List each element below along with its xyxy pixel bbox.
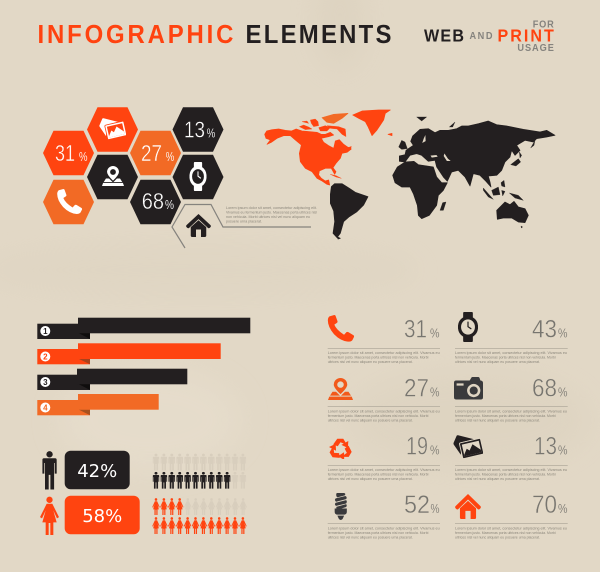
stat: photo cards 13%: % bbox=[558, 443, 568, 458]
callout text: Lorem ipsum dolor sit amet, consectetur adipiscing elit. bbox=[226, 205, 317, 210]
title: ELEMENTS bbox=[246, 20, 392, 49]
hexagon cluster bbox=[43, 107, 317, 248]
hexagon: 13% bbox=[172, 107, 224, 152]
bar 2: 2 bbox=[43, 352, 48, 362]
hexagon: phone bbox=[43, 180, 94, 224]
ranked ribbon bars bbox=[37, 318, 250, 415]
stat: recycle 19%: 19 bbox=[406, 433, 428, 461]
stat: bulb 52%: ultrices nisl vel nunc aliquam eu posuere urna placerat. bbox=[328, 536, 413, 540]
stat: pin 27%: 27 bbox=[404, 375, 429, 403]
stat: recycle 19%: % bbox=[430, 443, 440, 458]
stat: camera 68%: 68 bbox=[532, 375, 557, 403]
stat: phone 31% bbox=[328, 315, 440, 364]
stat: watch 43% bbox=[455, 312, 568, 364]
subtitle: web and print usage: WEB bbox=[424, 26, 464, 46]
stat: recycle 19%: fermentum justo. Maecenas porta ultrices nisl non vehicula. Morbi bbox=[328, 473, 429, 477]
hexagon: photo cards bbox=[87, 107, 138, 152]
hexagon: 68% bbox=[130, 180, 181, 224]
stat: house 70%: 70 bbox=[532, 491, 557, 519]
stat: house 70%: % bbox=[558, 501, 568, 516]
icon: woman bbox=[40, 497, 59, 535]
stat: photo cards 13%: fermentum justo. Maecenas porta ultrices nisl non vehicula. Morbi bbox=[455, 473, 556, 477]
box: 42%: 42% bbox=[77, 461, 117, 482]
stat: house 70%: fermentum justo. Maecenas porta ultrices nisl non vehicula. Morbi bbox=[455, 531, 556, 535]
title bbox=[38, 20, 392, 49]
stat: watch 43%: ultrices nisl vel nunc aliquam eu posuere urna placerat. bbox=[455, 360, 540, 364]
stat: camera 68%: Lorem ipsum dolor sit amet, consectetur adipiscing elit. Vivamus eu bbox=[455, 409, 567, 413]
stat: phone 31%: % bbox=[430, 326, 440, 341]
hexagon: 27% bbox=[130, 131, 181, 175]
stat: bulb 52% bbox=[328, 491, 440, 540]
eurasia bbox=[399, 121, 555, 187]
subtitle: web and print usage: PRINT bbox=[498, 26, 555, 46]
stat: phone 31%: 31 bbox=[404, 316, 427, 344]
stat: camera 68% bbox=[454, 375, 568, 423]
hexagon: watch bbox=[172, 155, 224, 199]
stat: bulb 52%: fermentum justo. Maecenas porta ultrices nisl non vehicula. Morbi bbox=[328, 531, 429, 535]
old world bbox=[393, 117, 555, 228]
africa bbox=[393, 161, 447, 219]
americas and greenland bbox=[265, 110, 392, 239]
stat: house 70% bbox=[455, 491, 568, 540]
hexagon: 68%: 68 bbox=[142, 188, 164, 214]
icon: man bbox=[42, 451, 57, 490]
islands bbox=[399, 117, 535, 228]
subtitle: web and print usage: FOR bbox=[533, 19, 554, 30]
stat: phone 31%: ultrices nisl vel nunc aliquam eu posuere urna placerat. bbox=[328, 360, 413, 364]
pictogram: women bbox=[152, 498, 247, 534]
hexagon: 27%: % bbox=[166, 149, 175, 164]
hexagon: 68%: % bbox=[165, 197, 174, 212]
stat: recycle 19% bbox=[327, 433, 440, 481]
bar 2 bbox=[37, 343, 221, 364]
stat: watch 43%: fermentum justo. Maecenas porta ultrices nisl non vehicula. Morbi bbox=[455, 356, 556, 360]
bar 1: 1 bbox=[43, 327, 48, 336]
subtitle: web and print usage: AND bbox=[470, 31, 493, 42]
stat: watch 43%: % bbox=[558, 326, 568, 341]
callout text: posuere urna placerat. bbox=[226, 218, 262, 224]
stat: pin 27%: % bbox=[430, 385, 440, 400]
stat: pin 27%: ultrices nisl vel nunc aliquam eu posuere urna placerat. bbox=[328, 419, 413, 423]
greenland bbox=[353, 110, 392, 136]
stat: bulb 52%: % bbox=[430, 501, 440, 516]
south america bbox=[330, 184, 368, 239]
callout text bbox=[226, 205, 317, 224]
hexagon: 13%: 13 bbox=[184, 116, 205, 142]
stat: recycle 19%: ultrices nisl vel nunc aliquam eu posuere urna placerat. bbox=[328, 477, 413, 481]
hexagon: 13%: % bbox=[207, 125, 216, 140]
gender split bbox=[40, 451, 140, 535]
stat: photo cards 13%: 13 bbox=[534, 433, 557, 461]
stat: bulb 52%: Lorem ipsum dolor sit amet, consectetur adipiscing elit. Vivamus eu bbox=[328, 526, 440, 530]
stat: camera 68%: % bbox=[558, 385, 568, 400]
arctic islands and cuba bbox=[299, 119, 351, 178]
stat: phone 31%: fermentum justo. Maecenas porta ultrices nisl non vehicula. Morbi bbox=[328, 356, 429, 360]
callout text: Vivamus eu fermentum justo. Maecenas porta ultrices nisl bbox=[226, 210, 317, 214]
stat: pin 27% bbox=[328, 375, 440, 423]
stat: phone 31%: Lorem ipsum dolor sit amet, consectetur adipiscing elit. Vivamus eu bbox=[328, 351, 440, 355]
stat: camera 68%: ultrices nisl vel nunc aliquam eu posuere urna placerat. bbox=[455, 419, 540, 423]
hexagon: 31%: 31 bbox=[55, 140, 75, 166]
stat: bulb 52%: 52 bbox=[404, 491, 430, 519]
bar 4: 4 bbox=[43, 404, 48, 412]
stat: recycle 19%: Lorem ipsum dolor sit amet, consectetur adipiscing elit. Vivamus eu bbox=[328, 468, 440, 472]
callout text: non vehicula. Morbi ultrices nisl vel nunc aliquam eu bbox=[226, 214, 310, 219]
stat: camera 68%: fermentum justo. Maecenas porta ultrices nisl non vehicula. Morbi bbox=[455, 414, 556, 418]
world map bbox=[265, 110, 555, 239]
subtitle: web and print usage: USAGE bbox=[517, 43, 554, 54]
australia bbox=[497, 201, 528, 223]
hexagon: map pin bbox=[87, 155, 138, 199]
box: 58%: 58% bbox=[82, 506, 122, 527]
outlined hexagon callout line bbox=[172, 204, 311, 248]
stat: watch 43%: Lorem ipsum dolor sit amet, consectetur adipiscing elit. Vivamus eu bbox=[455, 351, 567, 355]
stat: house 70%: Lorem ipsum dolor sit amet, consectetur adipiscing elit. Vivamus eu bbox=[455, 526, 567, 530]
stat: pin 27%: Lorem ipsum dolor sit amet, consectetur adipiscing elit. Vivamus eu bbox=[328, 409, 440, 413]
stat: photo cards 13% bbox=[453, 433, 568, 481]
bar 4 bbox=[37, 394, 159, 415]
icon: house bbox=[186, 214, 211, 237]
pictogram: men bbox=[153, 454, 246, 489]
stat: house 70%: ultrices nisl vel nunc aliquam eu posuere urna placerat. bbox=[455, 536, 540, 540]
hexagon: 31% bbox=[43, 131, 94, 175]
title: INFOGRAPHIC bbox=[38, 20, 233, 49]
stat: pin 27%: fermentum justo. Maecenas porta ultrices nisl non vehicula. Morbi bbox=[328, 414, 429, 418]
hexagon: 31%: % bbox=[79, 149, 88, 164]
hexagon: 27%: 27 bbox=[141, 140, 162, 166]
stat: photo cards 13%: Lorem ipsum dolor sit amet, consectetur adipiscing elit. Vivamus eu bbox=[455, 468, 567, 472]
stat: photo cards 13%: ultrices nisl vel nunc aliquam eu posuere urna placerat. bbox=[455, 477, 540, 481]
bar 1 bbox=[37, 318, 250, 339]
bar 3: 3 bbox=[43, 378, 48, 387]
subtitle: web and print usage bbox=[424, 19, 555, 54]
ellesmere island bbox=[322, 113, 348, 123]
stat: watch 43%: 43 bbox=[532, 316, 557, 344]
north america bbox=[265, 129, 351, 185]
bar 3 bbox=[37, 369, 187, 390]
